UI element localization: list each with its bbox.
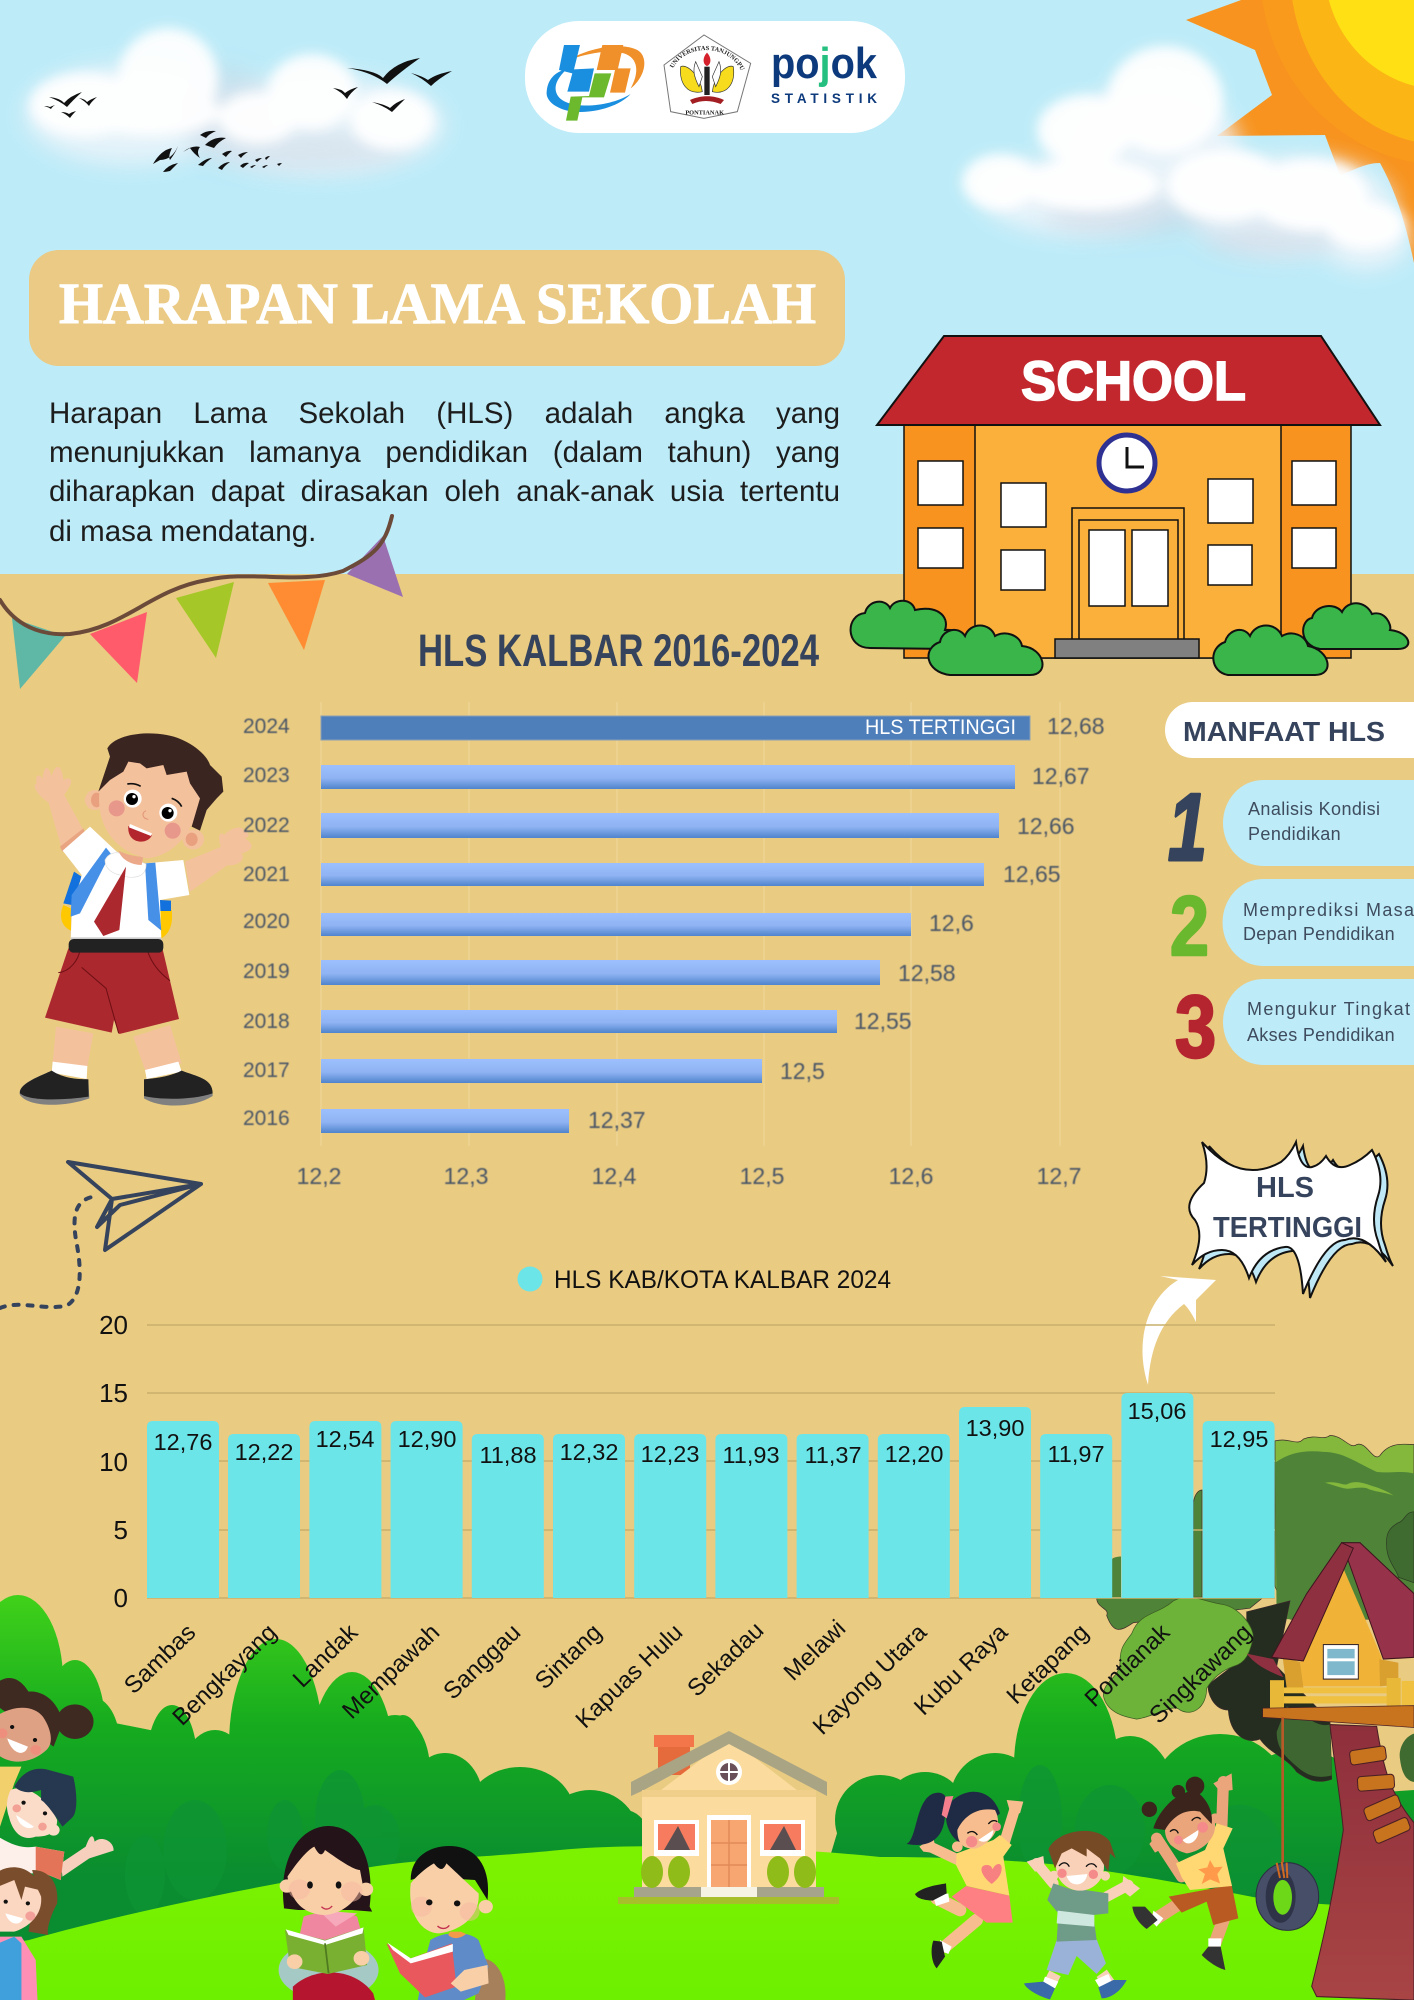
landscape: grass hill [0,1846,1414,2000]
regency and city labels: Bengkayang [167,1619,282,1731]
benefit 1: 1 [1168,773,1207,881]
benefit 2: 2 [1170,880,1209,973]
cloud right [962,46,1410,270]
description paragraph [49,397,840,548]
regency and city labels: Sintang [530,1619,607,1695]
columns [147,1393,1275,1598]
tree and treehouse [1097,1435,1414,2000]
landscape: bushes left [0,1595,655,1960]
school roof: SCHOOL [1021,349,1246,412]
bunting garland [0,516,403,689]
description paragraph: menunjukkan lamanya pendidikan (dalam tahun) yang [49,436,840,469]
column values: 12,54 [316,1426,374,1452]
school building [851,336,1408,675]
trunk ladder steps [1349,1746,1411,1844]
child: navy hair boy [0,1769,114,1880]
value labels: 12,37 [588,1107,646,1133]
house [618,1731,839,1904]
benefit 3: Mengukur Tingkat [1247,999,1410,1019]
logo pill [525,21,905,133]
y axis labels: 10 [99,1447,128,1477]
column chart: HLS kab/kota Kalbar 2024 [99,1310,1275,1740]
benefit 2: Memprediksi Masa [1243,900,1414,920]
value labels: 12,58 [898,960,956,986]
children: reading girl and boy [279,1826,506,2000]
y axis labels: 15 [99,1378,128,1408]
regency and city labels: Sanggau [438,1619,526,1705]
column values: 12,22 [235,1439,293,1465]
description paragraph: Harapan Lama Sekolah (HLS) adalah angka yang [49,397,840,430]
x axis labels [297,1163,1081,1189]
year axis labels: 2023 [243,764,290,787]
y axis labels: 20 [99,1310,128,1340]
column values: 12,76 [154,1429,212,1455]
y axis labels: 0 [114,1583,128,1613]
sun [1186,0,1414,263]
child: jumping boy [1024,1831,1140,1999]
children: peeking group left [0,1678,114,2000]
column values: 12,95 [1210,1426,1268,1452]
benefit 2 [1170,879,1414,973]
column values: 13,90 [966,1415,1024,1441]
logo: Universitas Tanjungpura crest: PONTIANAK [685,109,724,116]
callout burst: HLS Tertinggi [1189,1142,1393,1298]
logo: BPS [547,45,644,121]
regency and city labels: Sambas [119,1619,201,1699]
logo: pojok statistik: pojok [771,39,877,88]
child: reading boy [386,1846,506,2000]
paper plane with dotted trail [0,1162,201,1308]
value labels: 12,5 [780,1058,825,1084]
tree bright foliage [1103,1597,1253,1719]
heading pill: Manfaat HLS: MANFAAT HLS [1183,716,1385,747]
bar: 2024 highlighted: HLS TERTINGGI [865,716,1016,739]
heading pill: Manfaat HLS [1165,702,1414,758]
column values: 15,06 [1128,1398,1186,1424]
benefit 3: Akses Pendidikan [1247,1025,1395,1045]
bars: 2016 to 2023 [321,765,1015,1133]
regency and city labels: Pontianak [1080,1618,1176,1712]
child: reading girl [279,1826,379,2000]
column values: 12,23 [641,1441,699,1467]
benefit 1: Pendidikan [1248,824,1341,844]
child: brown hair girl [0,1867,57,2000]
year axis labels: 2021 [243,863,290,886]
benefit 1 [1168,773,1414,881]
x axis labels: 12,5 [740,1163,784,1189]
column values: 12,90 [398,1426,456,1452]
arrow to callout [1142,1276,1216,1385]
benefit 2: Depan Pendidikan [1243,924,1395,944]
y axis labels: 5 [114,1515,128,1545]
boy illustration [20,733,252,1106]
description paragraph: di masa mendatang. [49,515,316,548]
callout burst: HLS Tertinggi: HLS [1256,1172,1314,1204]
x axis labels: 12,2 [297,1163,341,1189]
value labels: 12,66 [1017,813,1075,839]
background: sand ground [0,574,1414,2000]
year axis labels: 2020 [243,910,290,933]
x axis labels: 12,3 [444,1163,488,1189]
title banner [29,250,845,366]
school door [1055,508,1199,658]
horizontal bar chart: HLS Kalbar [243,702,1105,1189]
tree trunk [1312,1725,1414,2000]
logo: Universitas Tanjungpura crest [664,34,752,119]
column values: 11,88 [479,1442,537,1468]
year axis labels: 2019 [243,960,290,983]
child: curly hair girl [0,1678,94,1827]
child: jumping girl [907,1792,1023,1968]
column values: 11,97 [1047,1441,1105,1467]
value labels: 12,55 [854,1008,912,1034]
x axis labels: 12,6 [889,1163,933,1189]
tree foliage back [1097,1435,1414,1782]
value labels: 12,65 [1003,861,1061,887]
column values: 11,93 [722,1442,780,1468]
regency and city labels [119,1615,1257,1740]
y axis labels [99,1310,128,1613]
landscape: bushes right [820,1673,1414,1920]
benefit 3: 3 [1175,978,1216,1076]
column values: 12,32 [560,1439,618,1465]
school bushes [851,601,1408,675]
school clock [1099,435,1155,491]
column values: 11,37 [804,1442,862,1468]
x axis labels: 12,4 [592,1163,637,1189]
value labels: 12,68 [1047,713,1105,739]
regency and city labels: Kubu Raya [909,1618,1014,1721]
x axis labels: 12,7 [1037,1163,1081,1189]
logo: Universitas Tanjungpura crest: UNIVERSITAS TANJUNGPURA [670,46,745,70]
year axis labels [243,715,290,1130]
title banner: HARAPAN LAMA SEKOLAH [59,271,816,336]
heading: HLS Kalbar 2016-2024: HLS KALBAR 2016-2024 [418,625,819,676]
regency and city labels: Sekadau [682,1617,769,1702]
regency and city labels: Landak [288,1618,364,1693]
column values [154,1398,1268,1468]
year axis labels: 2016 [243,1107,290,1130]
year axis labels: 2022 [243,814,290,837]
logo: pojok statistik: STATISTIK [771,91,877,106]
legend: HLS KAB/KOTA KALBAR 2024 [554,1266,891,1294]
school roof [877,336,1380,425]
regency and city labels: Kayong Utara [808,1618,933,1740]
benefit 1: Analisis Kondisi [1248,799,1380,819]
regency and city labels: Mempawah [337,1619,445,1724]
year axis labels: 2018 [243,1010,290,1033]
value labels: 12,6 [929,910,974,936]
callout burst: HLS Tertinggi: TERTINGGI [1213,1212,1362,1244]
treehouse [1247,1543,1414,1727]
year axis labels: 2024 [243,715,290,738]
value labels: 12,67 [1032,763,1090,789]
regency and city labels: Kapuas Hulu [571,1619,688,1734]
value labels [588,713,1105,1133]
regency and city labels: Ketapang [1001,1619,1094,1710]
tire swing [1256,1717,1319,1930]
bar: 2024 highlighted [321,716,1030,740]
birds [44,58,452,172]
regency and city labels: Singkawang [1144,1619,1257,1729]
children: jumping trio [907,1773,1238,1999]
background: sky [0,0,1414,575]
benefit 3 [1175,978,1414,1076]
child: jumping girl with star [1132,1773,1238,1970]
cloud left [25,28,445,175]
description paragraph: diharapkan dapat dirasakan oleh anak-anak usia tertentu [49,475,840,508]
year axis labels: 2017 [243,1059,290,1082]
column values: 12,20 [885,1441,943,1467]
regency and city labels: Melawi [779,1615,851,1686]
